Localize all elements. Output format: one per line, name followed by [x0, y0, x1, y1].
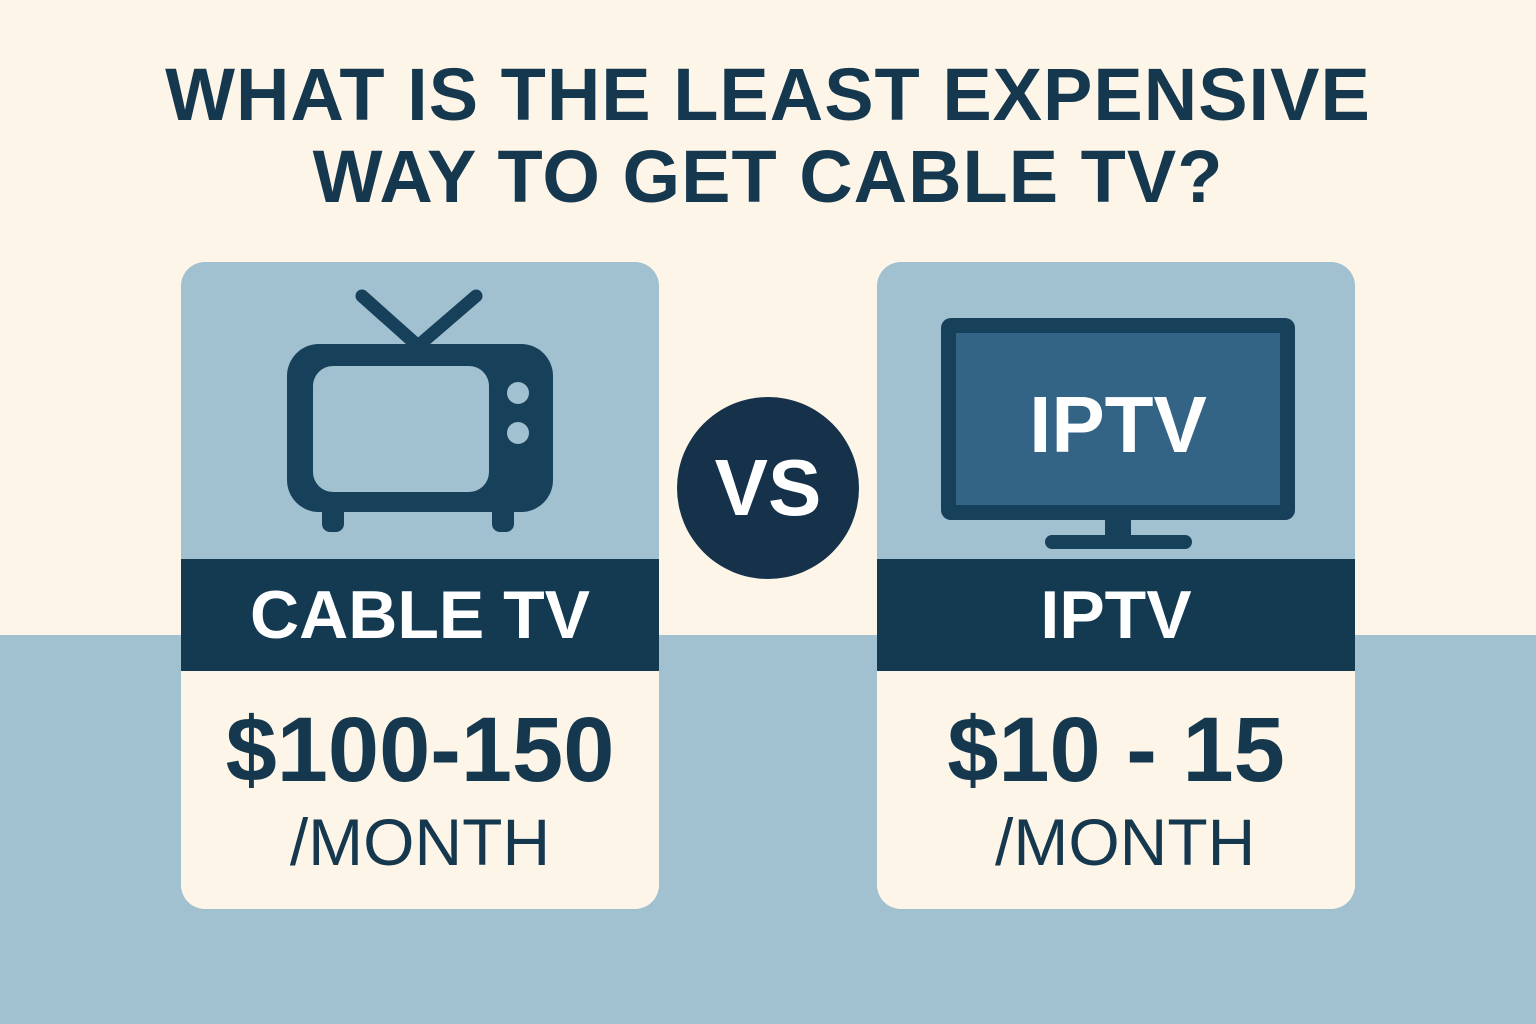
vs badge: VS: [715, 443, 821, 532]
label: iptv: IPTV: [1040, 577, 1192, 653]
title: [165, 53, 1371, 218]
panel: iptv: [877, 262, 1355, 909]
label: iptv: [877, 559, 1355, 671]
per month: iptv: /MONTH: [995, 805, 1255, 879]
title: WAY TO GET CABLE TV?: [313, 135, 1223, 218]
vs badge: [677, 397, 859, 579]
per month: cable: /MONTH: [290, 805, 550, 879]
panel: cable tv: [181, 262, 659, 909]
price: cable: $100-150: [226, 699, 614, 801]
icon: flat monitor: IPTV: [1029, 380, 1207, 469]
label: cable tv: CABLE TV: [250, 577, 590, 653]
label: cable tv: [181, 559, 659, 671]
price: iptv: $10 - 15: [947, 699, 1285, 801]
title: WHAT IS THE LEAST EXPENSIVE: [165, 53, 1371, 136]
